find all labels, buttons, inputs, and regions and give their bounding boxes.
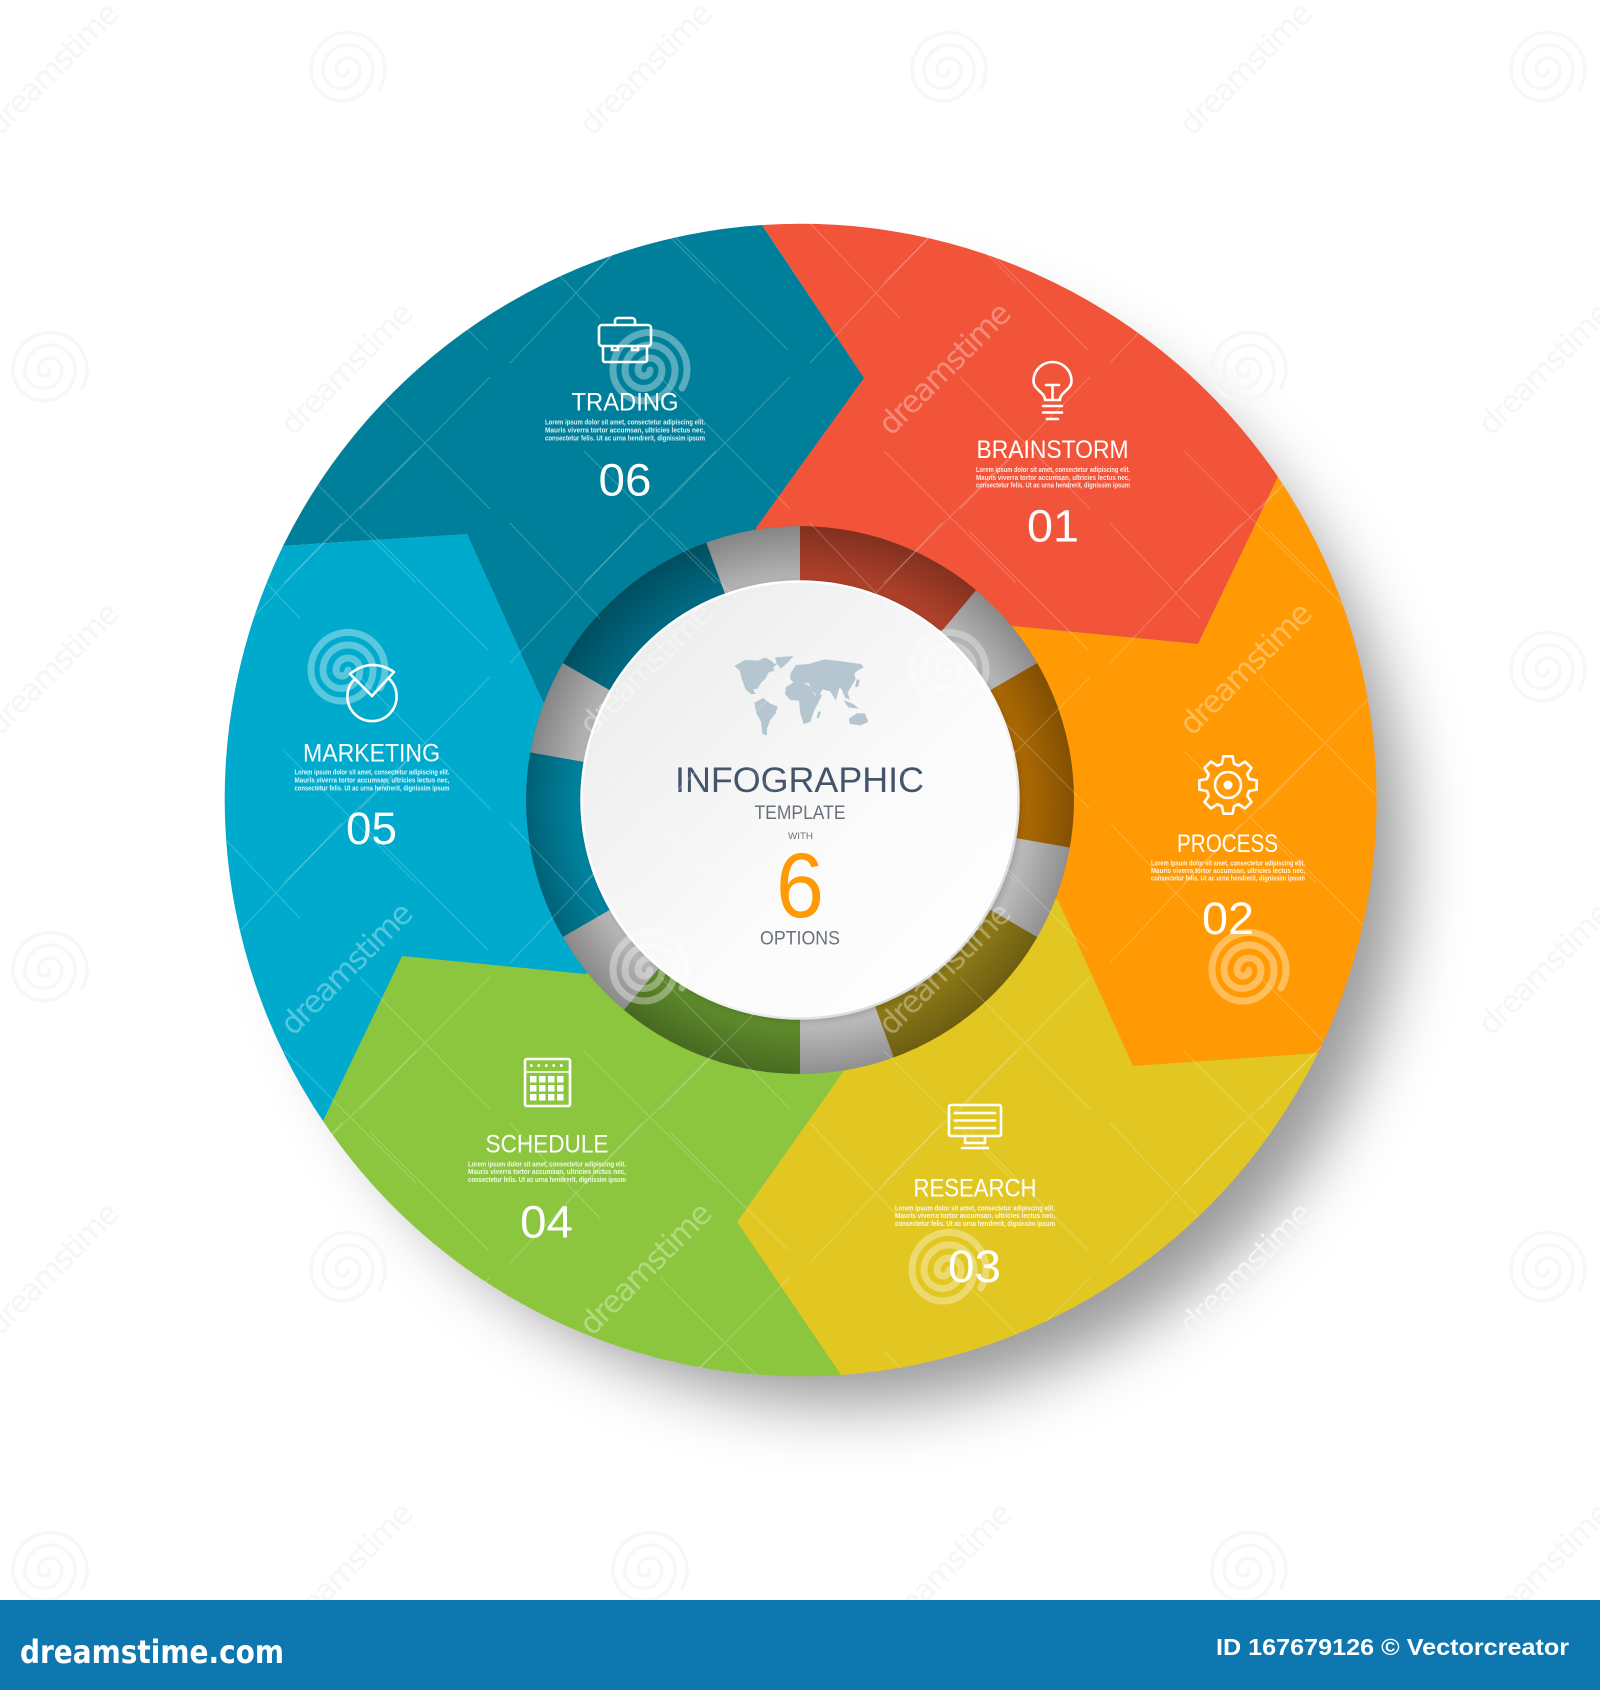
icon: light bulb <box>1034 362 1072 419</box>
body text: schedule: Lorem ipsum dolor sit amet, consectetur adipiscing elit. <box>468 1160 626 1168</box>
watermark text: dreamstime <box>273 295 420 442</box>
icon: gear <box>1199 756 1257 814</box>
panel: 02 process <box>800 477 1377 1066</box>
watermark text: dreamstime <box>1172 595 1319 742</box>
footer image id: ID 167679126 © Vectorcreator <box>1216 1634 1569 1660</box>
number: 03: 03 <box>948 1241 1001 1292</box>
body text: process <box>1151 858 1305 882</box>
icon: pie chart <box>347 665 397 721</box>
body text: marketing: Mauris viverra tortor accumsan, ultricies lectus nec, <box>294 776 450 784</box>
watermark text: dreamstime <box>1172 1195 1319 1342</box>
centre circle <box>582 582 1018 1018</box>
panel: 06 trading <box>283 225 864 800</box>
panel: 03 research <box>737 800 1318 1375</box>
wedge: research <box>737 800 1318 1375</box>
body text: schedule: Mauris viverra tortor accumsan, ultricies lectus nec, <box>468 1167 626 1176</box>
wedge: process <box>800 477 1377 1066</box>
body text: research: consectetur felis. Ut ac urna hendrerit, dignissim ipsum <box>895 1219 1055 1228</box>
footer banner <box>0 1600 1600 1690</box>
heading: marketing: MARKETING <box>303 740 440 768</box>
heading: process: PROCESS <box>1177 830 1278 858</box>
number: 05: 05 <box>346 803 397 854</box>
watermark text: dreamstime <box>572 595 719 742</box>
body text: process: consectetur felis. Ut ac urna hendrerit, dignissim ipsum <box>1151 874 1305 882</box>
number: 04: 04 <box>520 1196 573 1248</box>
watermark text: dreamstime <box>572 1195 719 1342</box>
number: 06: 06 <box>598 454 652 506</box>
body text: trading: consectetur felis. Ut ac urna hendrerit, dignissim ipsum <box>545 434 705 442</box>
number: 02: 02 <box>1202 893 1254 944</box>
inner ring of shaded segments <box>526 526 1074 1074</box>
body text: research: Lorem ipsum dolor sit amet, consectetur adipiscing elit. <box>895 1204 1055 1212</box>
body text: research <box>895 1204 1055 1228</box>
body text: marketing: Lorem ipsum dolor sit amet, consectetur adipiscing elit. <box>294 768 450 776</box>
body text: trading: Mauris viverra tortor accumsan, ultricies lectus nec, <box>545 426 705 434</box>
heading: trading: TRADING <box>572 388 678 416</box>
panel: 05 marketing <box>225 534 800 1121</box>
subtitle: template: TEMPLATE <box>754 802 846 824</box>
shadow of centre circle <box>582 582 1022 1022</box>
footer logo text: dreamstime.com <box>20 1633 284 1671</box>
panel: 01 brainstorm <box>756 224 1278 800</box>
body text: schedule: consectetur felis. Ut ac urna hendrerit, dignissim ipsum <box>468 1175 626 1184</box>
body text: marketing <box>294 768 450 792</box>
heading: schedule: SCHEDULE <box>486 1130 608 1158</box>
body text: process: Lorem ipsum dolor sit amet, consectetur adipiscing elit. <box>1151 858 1305 868</box>
watermark text: dreamstime <box>871 895 1018 1042</box>
body text: schedule <box>468 1160 626 1184</box>
icon: briefcase <box>599 318 651 362</box>
world map <box>734 656 868 735</box>
wedge: marketing <box>225 534 800 1121</box>
watermark crosshair lines <box>223 223 1377 1377</box>
icon: calendar <box>525 1059 570 1106</box>
heading: brainstorm: BRAINSTORM <box>976 436 1128 464</box>
body text: brainstorm: Mauris viverra tortor accumsan, ultricies lectus nec, <box>976 473 1130 482</box>
body text: trading <box>545 418 705 442</box>
watermark text: dreamstime <box>872 1495 1019 1642</box>
heading: research: RESEARCH <box>914 1174 1036 1202</box>
body text: process: Mauris viverra tortor accumsan, ultricies lectus nec, <box>1151 866 1305 875</box>
icon: monitor <box>949 1105 1001 1148</box>
wedge: trading <box>283 225 864 800</box>
panel: 04 schedule <box>323 800 843 1376</box>
big number 6: 6 <box>776 835 824 937</box>
label: with: WITH <box>788 831 813 842</box>
watermark text: dreamstime <box>273 1495 420 1642</box>
watermark text: dreamstime <box>273 895 420 1042</box>
disc drop shadow <box>292 292 1404 1404</box>
body text: marketing: consectetur felis. Ut ac urna hendrerit, dignissim ipsum <box>294 784 450 792</box>
title: INFOGRAPHIC <box>675 761 924 800</box>
body text: brainstorm: Lorem ipsum dolor sit amet, consectetur adipiscing elit. <box>976 465 1130 474</box>
wedge: schedule <box>323 800 843 1376</box>
label: options: OPTIONS <box>760 928 840 950</box>
body text: trading: Lorem ipsum dolor sit amet, consectetur adipiscing elit. <box>545 418 705 426</box>
number: 01: 01 <box>1027 500 1079 552</box>
body text: brainstorm <box>976 465 1130 490</box>
watermark text: dreamstime <box>871 295 1018 442</box>
wedge: brainstorm <box>756 224 1278 800</box>
body text: research: Mauris viverra tortor accumsan, ultricies lectus nec, <box>895 1211 1055 1220</box>
body text: brainstorm: consectetur felis. Ut ac urna hendrerit, dignissim ipsum <box>976 480 1130 490</box>
